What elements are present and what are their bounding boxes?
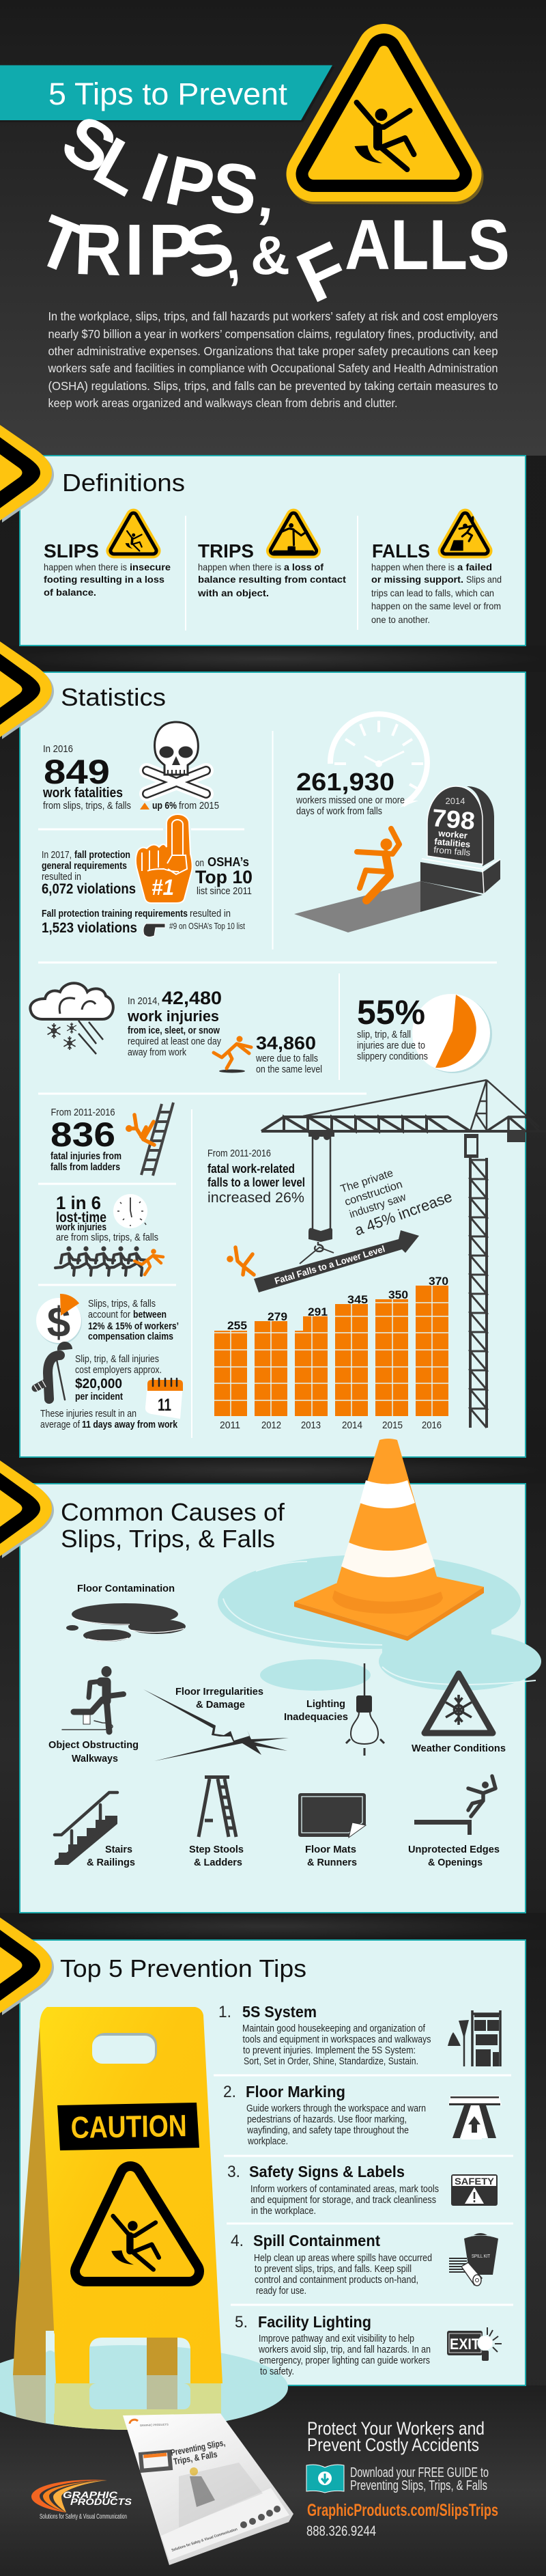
chart arrow: fatal falls to a lower level: Fatal Falls to a Lower Level <box>274 1244 386 1286</box>
title: SLIPS, TRIPS, & FALLS: & <box>250 225 290 286</box>
stat: 1,523 violations <box>42 908 245 937</box>
definition: slips: footing resulting in a loss <box>44 574 164 585</box>
tip 2: floor marking: pedestrians of hazards. Use floor marking, <box>247 2114 407 2125</box>
stat: 849 work fatalities: from slips, trips, & falls <box>43 800 131 812</box>
stat: 6,072 violations <box>42 849 253 897</box>
cause: object obstructing walkways: Walkways <box>72 1753 118 1764</box>
icon: spill kit: SPILL KIT <box>472 2253 490 2259</box>
title: SLIPS, TRIPS, & FALLS: I <box>133 137 177 217</box>
tip 4: spill containment <box>231 2232 498 2297</box>
icon: large slip warning sign <box>314 51 456 177</box>
illustration: booklet cover: Preventing Slips, <box>170 2437 226 2458</box>
definition: falls: or missing support. <box>371 574 463 585</box>
illustration: caution wet floor sign: CAUTION <box>70 2108 187 2145</box>
logo: Graphic Products: PRODUCTS <box>70 2496 132 2507</box>
cause: step stools and ladders: & Ladders <box>194 1857 242 1868</box>
illustration: booklet cover: GRAPHIC PRODUCTS <box>140 2423 169 2427</box>
stat: $20,000 per incident <box>75 1353 162 1402</box>
definition: falls: a failed <box>457 562 492 572</box>
pie chart: 55%: slip, trip, & fall <box>357 1029 411 1040</box>
definition: trips <box>197 516 346 598</box>
definition: slips: insecure <box>130 562 171 572</box>
stat: 6,072 violations: OSHA’s <box>207 855 249 869</box>
pie chart: 55% <box>357 993 492 1073</box>
stat: 11 days away: 11 days away from work <box>82 1419 178 1430</box>
title: SLIPS, TRIPS, & FALLS: S <box>173 205 243 296</box>
cause: step stools and ladders <box>189 1775 244 1868</box>
stat: 836 ladder falls: 836 <box>51 1116 115 1154</box>
icon: foam finger #1 <box>136 814 192 903</box>
definition: slips <box>44 516 171 598</box>
cause: unprotected edges and openings: & Openings <box>428 1857 483 1868</box>
illustration: caution wet floor sign <box>0 2007 288 2435</box>
stat: 849 work fatalities: 849 <box>44 753 110 791</box>
heading: top 5 tips: Top 5 Prevention Tips <box>60 1954 306 1982</box>
stat: 849 work fatalities <box>42 743 219 812</box>
heading: common causes: Slips, Trips, & Falls <box>61 1525 275 1553</box>
title: SLIPS, TRIPS, & FALLS: T <box>27 199 96 290</box>
illustration: water puddle <box>218 1555 541 1691</box>
cause: floor mats and runners: & Runners <box>307 1857 357 1868</box>
cause: weather conditions <box>412 1674 506 1754</box>
cause: floor irregularities and damage: Floor Irregularities <box>175 1686 263 1698</box>
bar chart: fatal falls by year: 2011 <box>220 1419 240 1431</box>
bar chart: fatal falls by year: 2016 <box>422 1419 442 1431</box>
definition: falls <box>371 516 502 625</box>
tip 1: 5S system: to prevent injuries. Implement the 5S System: <box>243 2045 416 2056</box>
stat: 261,930 <box>296 768 405 817</box>
tip 4: spill containment: control and containment products on-hand, <box>255 2274 418 2286</box>
text: fatal work-related falls: falls to a lower level <box>207 1176 305 1189</box>
stat: workers' compensation share: account for <box>88 1309 130 1320</box>
stat: 42,480 work injuries: from ice, sleet, or snow <box>128 1025 220 1036</box>
stat: 261,930: workers missed one or more <box>296 794 405 806</box>
tip 2: floor marking: wayfinding, and safety tape throughout the <box>246 2124 409 2136</box>
tip 2: floor marking: Guide workers through the workspace and warn <box>246 2103 426 2114</box>
tip 3: safety signs and labels: Safety Signs & Labels <box>249 2163 405 2180</box>
intro paragraph <box>48 309 498 410</box>
intro paragraph: workers safe and facilities in compliance with Occupational Safety and Health Administration <box>48 361 498 375</box>
cause: stairs and railings: Stairs <box>105 1844 132 1855</box>
stat: 1 in 6 lost-time: 1 in 6 <box>56 1193 101 1213</box>
tip 5: facility lighting: emergency, proper lighting can guide workers <box>259 2355 430 2366</box>
cause: stairs and railings: & Railings <box>87 1857 135 1868</box>
stat: 42,480 work injuries: away from work <box>128 1047 186 1058</box>
intro paragraph: In the workplace, slips, trips, and fall hazards put workers’ safety at risk and cost employers <box>48 309 498 323</box>
stat: 849 work fatalities: work fatalities <box>42 786 123 801</box>
definition: trips: balance resulting from contact <box>198 574 346 585</box>
definition: falls: trips can lead to falls, which can <box>371 587 494 598</box>
tip 4: spill containment: ready for use. <box>256 2285 306 2297</box>
definition: falls: FALLS <box>372 540 430 562</box>
call to action: Protect Your Workers and <box>307 2418 485 2439</box>
illustration: traffic cone <box>294 1439 484 1641</box>
stat: 261,930: days of work from falls <box>296 805 382 817</box>
icon: calendar: 11 <box>158 1396 171 1415</box>
slip hazard triangle <box>85 2176 189 2271</box>
illustration: booklet cover: Solutions for Safety & Visual Communication <box>171 2527 238 2553</box>
title: SLIPS, TRIPS, & FALLS: , <box>220 231 243 290</box>
tip 4: spill containment: to prevent slips, trips, and falls. Keep spill <box>255 2263 412 2275</box>
tip 1: 5S system: 1. <box>218 2003 231 2021</box>
stat: $20,000 per incident: Slip, trip, & fall injuries <box>75 1353 159 1365</box>
caution label <box>57 2103 199 2150</box>
tip 1: 5S system: Sort, Set in Order, Shine, Standardize, Sustain. <box>244 2055 418 2067</box>
chart arrow: fatal falls to a lower level <box>254 1230 419 1292</box>
bar chart: fatal falls by year <box>212 1275 450 1431</box>
stat: 11 days away <box>40 1408 178 1430</box>
cause: floor mats and runners <box>298 1793 366 1868</box>
definition: trips: with an object. <box>197 587 269 598</box>
cause: floor irregularities and damage: & Damage <box>196 1699 245 1711</box>
stat: $20,000 per incident: per incident <box>75 1391 123 1402</box>
title: SLIPS, TRIPS, & FALLS <box>27 99 510 318</box>
title: SLIPS, TRIPS, & FALLS: ALLS <box>345 206 510 285</box>
section marker: statistics <box>0 641 54 739</box>
intro paragraph: other administrative expenses. Organizations that take proper safety precautions can keep <box>48 344 498 358</box>
text: fatal work-related falls <box>207 1148 305 1206</box>
stat: 6,072 violations: In 2017, <box>42 849 72 861</box>
stat: 34,860: 34,860 <box>256 1033 316 1053</box>
handle hole <box>93 2033 157 2064</box>
definition: falls: happen when there is <box>371 562 455 572</box>
stat: 42,480 work injuries: required at least one day <box>128 1036 221 1047</box>
illustration: tombstone and shadow: 798 <box>431 803 476 835</box>
icon: storage shelf and broom <box>448 2010 500 2066</box>
stat: 6,072 violations: fall protection <box>74 849 130 861</box>
call to action <box>306 2418 498 2539</box>
logo: Graphic Products <box>31 2480 132 2521</box>
stat: 836 ladder falls: From 2011-2016 <box>51 1107 115 1118</box>
illustration: crane <box>261 1080 546 1428</box>
title: SLIPS, TRIPS, & FALLS: P <box>148 209 195 290</box>
cause: unprotected edges and openings <box>408 1776 500 1868</box>
text: fatal work-related falls: increased 26% <box>207 1190 304 1206</box>
heading: common causes: Common Causes of <box>61 1498 285 1526</box>
stat: 6,072 violations: 6,072 violations <box>42 881 136 897</box>
tip 3: safety signs and labels: 3. <box>227 2163 240 2181</box>
stat: 42,480 work injuries: 42,480 <box>162 988 222 1008</box>
definition: trips: a loss of <box>284 562 324 572</box>
icon: book download <box>306 2465 344 2493</box>
tip 1: 5S system: 5S System <box>242 2003 317 2021</box>
icon: foam finger #1: #1 <box>152 875 174 900</box>
stat: $20,000 per incident: cost employers approx. <box>75 1364 162 1376</box>
icon: spill kit <box>449 2233 498 2286</box>
stat: 11 days away: These injuries result in an <box>40 1408 136 1419</box>
definition: slips: happen when there is <box>44 562 127 572</box>
tip 5: facility lighting <box>235 2313 431 2377</box>
stat: 42,480 work injuries: In 2014, <box>128 995 160 1007</box>
panel: top 5 prevention tips <box>0 1917 526 2385</box>
illustration: booklet cover: Trips, & Falls <box>173 2449 218 2467</box>
cause: object obstructing walkways: Object Obstructing <box>48 1739 139 1751</box>
stat: 836 ladder falls <box>51 1107 121 1173</box>
panel: statistics <box>0 641 546 1457</box>
tip 4: spill containment: 4. <box>231 2232 244 2250</box>
cause: stairs and railings <box>55 1792 135 1868</box>
bar chart: fatal falls by year: 2015 <box>382 1419 403 1431</box>
logo: Graphic Products: GRAPHIC <box>63 2489 118 2500</box>
cause: step stools and ladders: Step Stools <box>189 1844 244 1855</box>
stat: 1,523 violations: resulted in <box>190 908 231 919</box>
icon: floor marking road <box>448 2096 502 2139</box>
cause: lighting inadequacies <box>284 1663 384 1756</box>
intro paragraph: (OSHA) regulations. Slips, trips, and falls can be prevented by taking certain measures to <box>48 379 498 393</box>
tip 5: facility lighting: 5. <box>235 2313 248 2331</box>
tip 4: spill containment: Help clean up areas where spills have occurred <box>254 2252 432 2264</box>
bar chart: fatal falls by year: 2013 <box>301 1419 321 1431</box>
tip 5: facility lighting: to safety. <box>260 2366 294 2377</box>
bar chart: fatal falls by year: 350 <box>388 1288 408 1301</box>
tip 1: 5S system: tools and equipment in workspaces and walkways <box>243 2034 431 2045</box>
stat: 1,523 violations: 1,523 violations <box>42 920 137 936</box>
tip 5: facility lighting: workers avoid slip, trip, and fall hazards. In an <box>258 2344 431 2355</box>
panel: common causes <box>0 1439 541 1913</box>
stat: 6,072 violations: resulted in <box>42 871 81 883</box>
bar chart: fatal falls by year: 291 <box>308 1305 328 1318</box>
heading: statistics: Statistics <box>61 683 166 711</box>
stat: 1,523 violations: #9 on OSHA’s Top 10 list <box>169 922 245 931</box>
cause: weather conditions: Weather Conditions <box>412 1743 506 1754</box>
stat: 849 work fatalities: from 2015 <box>179 800 219 812</box>
text: 45% increase <box>339 1167 455 1239</box>
stat: 6,072 violations: general requirements <box>42 860 127 872</box>
pie chart: 55%: injuries are due to <box>357 1040 425 1051</box>
icon: safety sign: SAFETY <box>455 2176 495 2187</box>
tip 3: safety signs and labels: in the workplace. <box>251 2205 316 2217</box>
call to action: Preventing Slips, Trips, & Falls <box>350 2478 487 2493</box>
stat: workers' compensation share: Slips, trips, & falls <box>88 1298 156 1310</box>
call to action: Download your FREE GUIDE to <box>350 2465 489 2480</box>
stat: 1,523 violations: Fall protection training requirements <box>42 908 188 919</box>
bar chart: fatal falls by year: 345 <box>347 1293 368 1306</box>
title banner: 5 Tips to Prevent <box>48 77 288 111</box>
section marker: causes <box>0 1460 54 1558</box>
icon: falling worker by arrow <box>227 1247 254 1275</box>
definition: falls: happen on the same level or from <box>371 600 501 611</box>
stat: 849 work fatalities: In 2016 <box>43 743 73 755</box>
definition: falls: one to another. <box>371 614 430 625</box>
stat: 42,480 work injuries: work injuries <box>127 1008 219 1025</box>
tip 2: floor marking: Floor Marking <box>246 2083 345 2101</box>
illustration: tombstone and shadow: worker <box>437 828 468 841</box>
illustration: booklet cover <box>123 2413 293 2565</box>
text: 45% increase: a 45% increase <box>352 1188 455 1239</box>
definition: slips: SLIPS <box>44 540 99 562</box>
pie chart: 55%: 55% <box>357 993 425 1031</box>
definition: trips: TRIPS <box>198 540 254 562</box>
reflection on puddle <box>13 2375 221 2435</box>
stat: 849 work fatalities: up 6% <box>152 800 177 812</box>
title: SLIPS, TRIPS, & FALLS: I <box>125 209 144 290</box>
heading: definitions: Definitions <box>62 469 185 497</box>
stat: 1 in 6 lost-time <box>55 1193 158 1243</box>
stat: 34,860 <box>255 1033 322 1075</box>
intro paragraph: nearly $70 billion a year in workers’ compensation claims, regulatory fines, productivity, and <box>48 327 498 341</box>
title: SLIPS, TRIPS, & FALLS: R <box>73 209 123 291</box>
illustration: tombstone and shadow: from falls <box>433 844 471 858</box>
title: SLIPS, TRIPS, & FALLS: , <box>255 164 280 230</box>
stat: 1 in 6 lost-time: lost-time <box>56 1210 106 1225</box>
title: SLIPS, TRIPS, & FALLS: S <box>50 99 129 190</box>
heading: common causes <box>61 1498 285 1553</box>
cause: floor contamination <box>66 1583 186 1642</box>
illustration: tombstone and shadow: 2014 <box>446 796 465 806</box>
call to action: 888.326.9244 <box>306 2523 376 2539</box>
puddle under sign <box>0 2345 288 2430</box>
logo: Graphic Products: Solutions for Safety & Visual Communication <box>40 2513 127 2521</box>
icon: worker slipping on puddle <box>214 1036 251 1072</box>
icon: injured worker on crutches <box>34 1342 72 1400</box>
stat: 6,072 violations: on <box>195 857 204 869</box>
tip 5: facility lighting: Facility Lighting <box>258 2313 371 2331</box>
definition: slips: of balance. <box>44 587 96 598</box>
title: SLIPS, TRIPS, & FALLS: P <box>159 141 221 227</box>
stat: 6,072 violations: list since 2011 <box>197 885 252 897</box>
title: SLIPS, TRIPS, & FALLS: L <box>82 122 157 211</box>
icon: line of workers running <box>55 1246 163 1275</box>
text: fatal work-related falls: fatal work-related <box>207 1162 295 1176</box>
text: fatal work-related falls: From 2011-2016 <box>207 1148 271 1159</box>
stat: 836 ladder falls: falls from ladders <box>51 1161 120 1173</box>
icon: storm cloud with snow and ice <box>30 983 113 1054</box>
bar chart: fatal falls by year: 279 <box>268 1310 287 1323</box>
icon: falling worker <box>357 829 399 900</box>
bar chart: fatal falls by year: 2014 <box>342 1419 362 1431</box>
definition: trips: happen when there is <box>198 562 281 572</box>
tip 1: 5S system: Maintain good housekeeping and organization of <box>242 2023 426 2034</box>
cause: floor irregularities and damage <box>143 1686 289 1761</box>
illustration: tombstone and shadow: fatalities <box>434 836 471 850</box>
bar chart: fatal falls by year: 370 <box>429 1275 448 1288</box>
stat: $20,000 per incident: $20,000 <box>75 1376 122 1391</box>
pie chart: 55%: slippery conditions <box>357 1051 428 1062</box>
tip 2: floor marking <box>223 2083 502 2147</box>
tip 2: floor marking: 2. <box>223 2083 236 2101</box>
tip 2: floor marking: workplace. <box>247 2135 288 2147</box>
stat: 34,860: were due to falls <box>255 1053 318 1064</box>
tip 3: safety signs and labels <box>227 2163 498 2217</box>
text: 45% increase: industry saw <box>348 1191 407 1221</box>
stat: workers' compensation share: $ <box>47 1299 70 1346</box>
stat: workers' compensation share: 12% & 15% of workers’ <box>88 1320 179 1332</box>
stat: 6,072 violations: Top 10 <box>195 867 253 887</box>
bar chart: fatal falls by year: 2012 <box>261 1419 281 1431</box>
icon: skull and crossbones <box>147 722 206 794</box>
tip 1: 5S system <box>218 2003 500 2067</box>
cause: lighting inadequacies: Inadequacies <box>284 1711 348 1723</box>
icon: exit sign with bulb <box>447 2327 502 2361</box>
call to action: Prevent Costly Accidents <box>307 2435 479 2455</box>
section marker: definitions <box>0 425 54 523</box>
cause: unprotected edges and openings: Unprotected Edges <box>408 1844 500 1855</box>
text: 45% increase: The private <box>339 1167 394 1195</box>
stat: 42,480 work injuries <box>127 988 222 1058</box>
cause: floor contamination: Floor Contamination <box>77 1583 175 1594</box>
icon: stopwatch arc <box>330 714 427 807</box>
icon: safety sign <box>451 2174 498 2206</box>
definition: falls: Slips and <box>466 574 502 585</box>
stat: 11 days away: average of <box>40 1419 81 1430</box>
tip 5: facility lighting: Improve pathway and exit visibility to help <box>259 2333 414 2344</box>
tip 3: safety signs and labels: Inform workers of contaminated areas, mark tools <box>250 2183 439 2195</box>
cause: floor mats and runners: Floor Mats <box>305 1844 356 1855</box>
tip 3: safety signs and labels: and equipment for storage, and track cleanliness <box>250 2194 436 2206</box>
stat: 836 ladder falls: fatal injuries from <box>51 1150 121 1162</box>
tip 4: spill containment: Spill Containment <box>253 2232 380 2249</box>
bar chart: fatal falls by year: 255 <box>227 1319 247 1332</box>
icon: wall clock <box>113 1194 147 1228</box>
icon: calendar <box>145 1379 183 1419</box>
stat: workers' compensation share <box>36 1294 179 1346</box>
title: SLIPS, TRIPS, & FALLS: S <box>205 146 264 231</box>
cause: object obstructing walkways <box>48 1666 139 1764</box>
intro paragraph: keep work areas organized and walkways clean from debris and clutter. <box>48 396 397 410</box>
stat: 1 in 6 lost-time: work injuries <box>55 1221 106 1233</box>
section marker: tips <box>0 1917 54 2015</box>
cause: lighting inadequacies: Lighting <box>306 1698 345 1710</box>
panel: definitions <box>0 425 526 646</box>
text: 45% increase: construction <box>343 1178 404 1208</box>
stat: 261,930: 261,930 <box>296 768 394 796</box>
icon: ladder with falling worker <box>126 1103 173 1176</box>
stat: workers' compensation share: compensation claims <box>88 1331 173 1342</box>
illustration: tombstone and shadow <box>294 786 500 932</box>
icon: exit sign with bulb: EXIT <box>450 2336 480 2353</box>
stat: 34,860: on the same level <box>256 1064 322 1075</box>
title banner <box>0 66 334 122</box>
stat: 1 in 6 lost-time: are from slips, trips, & falls <box>56 1232 158 1243</box>
stat: workers' compensation share: between <box>133 1309 167 1320</box>
title: SLIPS, TRIPS, & FALLS: F <box>286 227 360 318</box>
